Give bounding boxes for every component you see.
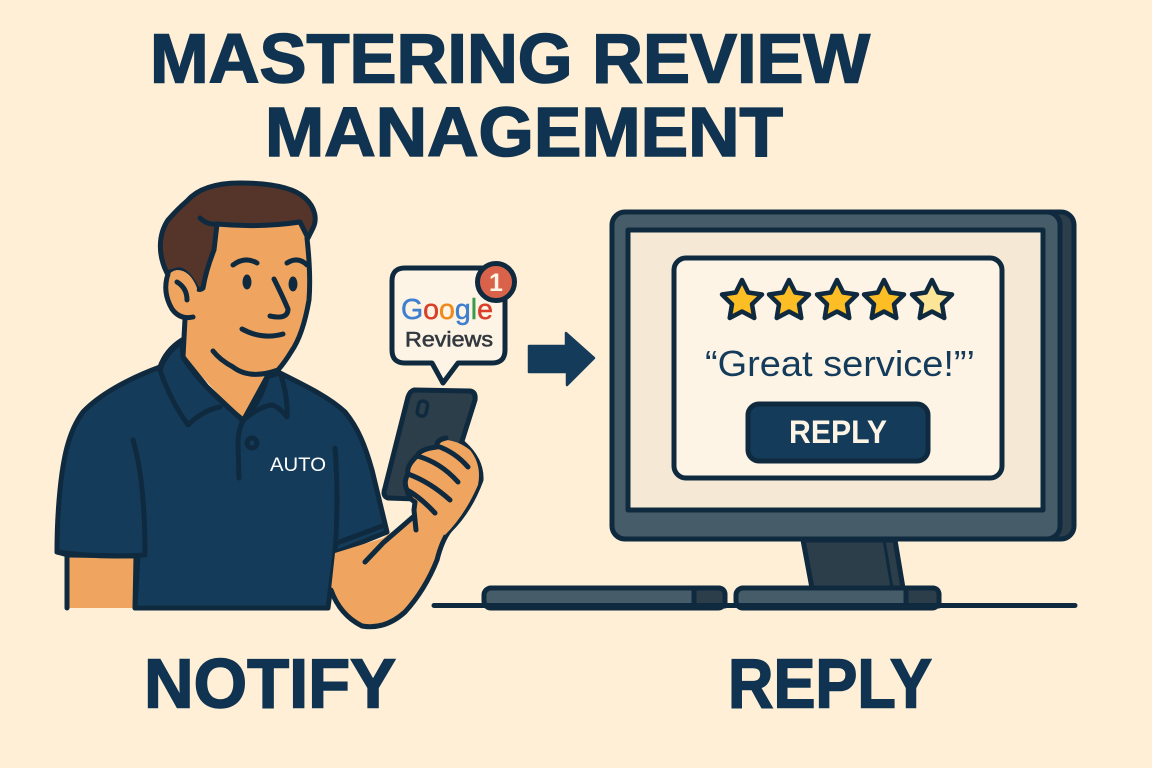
keyboard right xyxy=(736,588,939,608)
left arm outline xyxy=(57,552,145,608)
eyebrows xyxy=(233,260,307,265)
phone camera xyxy=(416,400,428,417)
nose xyxy=(270,279,288,317)
reply button xyxy=(748,404,928,461)
phone xyxy=(384,390,475,499)
smile xyxy=(242,329,283,336)
ear outline xyxy=(166,274,193,318)
title: MASTERING REVIEW xyxy=(150,20,870,98)
face line xyxy=(183,218,310,374)
left arm xyxy=(67,555,138,608)
title: MANAGEMENT xyxy=(265,93,783,171)
shirt collar and placket xyxy=(133,342,385,555)
notification badge: 1 xyxy=(489,269,503,297)
finger lines xyxy=(365,438,468,562)
arrow xyxy=(529,333,594,385)
label: reply: REPLY xyxy=(728,644,932,722)
forearm and hand xyxy=(331,439,480,627)
keyboard left xyxy=(484,588,725,608)
Google Reviews speech bubble xyxy=(392,264,514,383)
shirt logo: AUTO xyxy=(270,455,326,476)
fingers xyxy=(404,440,479,535)
monitor stand xyxy=(803,540,903,588)
title xyxy=(150,20,870,171)
desk line xyxy=(434,603,1075,608)
review card xyxy=(674,258,1002,478)
eyes xyxy=(242,274,298,292)
star rating xyxy=(722,280,952,318)
ear xyxy=(165,270,197,319)
reply button: REPLY xyxy=(789,414,887,450)
arm outline xyxy=(331,438,481,627)
Reviews label: Reviews xyxy=(405,328,493,352)
Google wordmark: Google xyxy=(401,294,493,326)
person with polo shirt holding phone xyxy=(57,183,481,627)
monitor screen xyxy=(628,230,1043,510)
desktop monitor xyxy=(434,212,1075,608)
neck and face xyxy=(180,222,309,421)
hair xyxy=(160,183,315,289)
review quote: “Great service!”’ xyxy=(705,343,975,384)
polo shirt xyxy=(57,340,387,608)
monitor bezel xyxy=(612,212,1060,539)
monitor back xyxy=(630,212,1074,539)
label: notify: NOTIFY xyxy=(144,644,396,722)
